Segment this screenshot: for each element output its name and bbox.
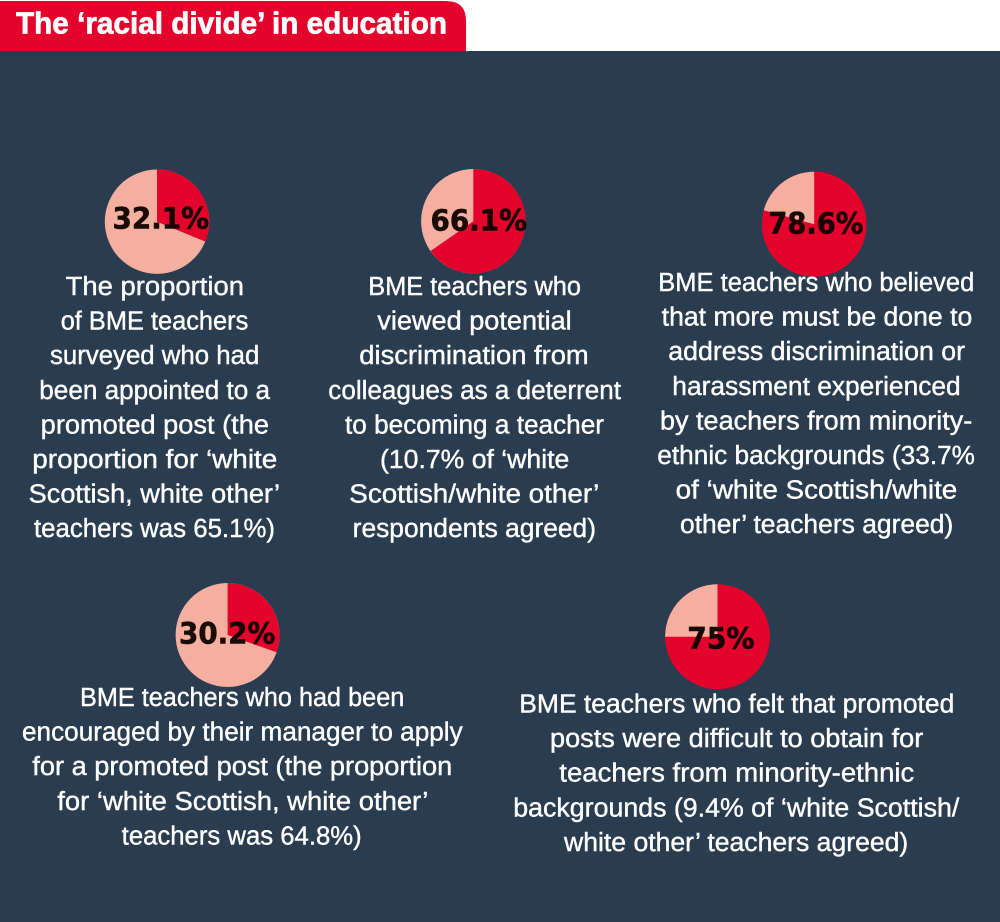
description: The proportion [66,273,244,301]
panel: deterrent 66.1% [328,169,621,543]
description: teachers was 65.1%) [34,515,275,543]
pie chart: 66.1% [421,169,526,273]
description: that more must be done to [662,304,972,332]
description: BME teachers who believed [658,269,974,297]
description: backgrounds (9.4% of ‘white Scottish/ [513,794,960,822]
description: teachers was 64.8%) [122,822,362,850]
description: for a promoted post (the proportion [32,753,452,781]
pie chart: 30.2% [176,583,280,687]
description: other’ teachers agreed) [680,511,953,539]
description: posts were difficult to obtain for [550,725,924,753]
description: BME teachers who had been [80,684,404,712]
panel: promoted post 32.1% [29,169,280,543]
pie chart: 78.6% [762,172,867,277]
description [657,269,975,539]
pie chart: 32.1% [105,169,209,274]
description: encouraged by their manager to apply [22,719,463,747]
panel: difficult to obtain 75% [513,584,960,857]
panel: more must be done 78.6% [657,172,975,539]
description: of ‘white Scottish/white [676,477,957,505]
pie chart: 75% [665,584,770,689]
description: of BME teachers [61,308,248,336]
value: 66.1%: 66.1% [430,204,527,238]
description: Scottish/white other’ [349,481,599,509]
description: ethnic backgrounds (33.7% [657,442,975,470]
panel: encouraged by manager 30.2% [22,583,463,850]
description: by teachers from minority- [660,407,972,435]
value: 78.6%: 78.6% [768,206,863,240]
description: promoted post (the [41,411,269,439]
description: for ‘white Scottish, white other’ [57,788,428,816]
description: respondents agreed) [353,515,596,543]
description: been appointed to a [39,377,271,405]
description: colleagues as a deterrent [328,377,621,405]
description: BME teachers who felt that promoted [519,690,954,718]
value: 32.1%: 32.1% [112,202,209,236]
description: address discrimination or [668,338,966,366]
description: proportion for ‘white [32,446,277,474]
description: white other’ teachers agreed) [563,829,908,857]
description [29,273,280,543]
description: surveyed who had [50,342,259,370]
description: teachers from minority-ethnic [559,760,915,788]
description [513,690,960,857]
description: to becoming a teacher [345,411,605,439]
description: discrimination from [359,342,589,370]
title: The ‘racial divide’ in education [16,6,447,40]
title banner [0,1,466,51]
description: BME teachers who [368,273,581,301]
description: harassment experienced [672,373,961,401]
value: 30.2%: 30.2% [179,616,275,650]
description: (10.7% of ‘white [380,446,569,474]
value: 75%: 75% [687,621,754,655]
description: Scottish, white other’ [29,481,280,509]
description: viewed potential [377,308,572,336]
description [22,684,463,850]
description [328,273,621,543]
